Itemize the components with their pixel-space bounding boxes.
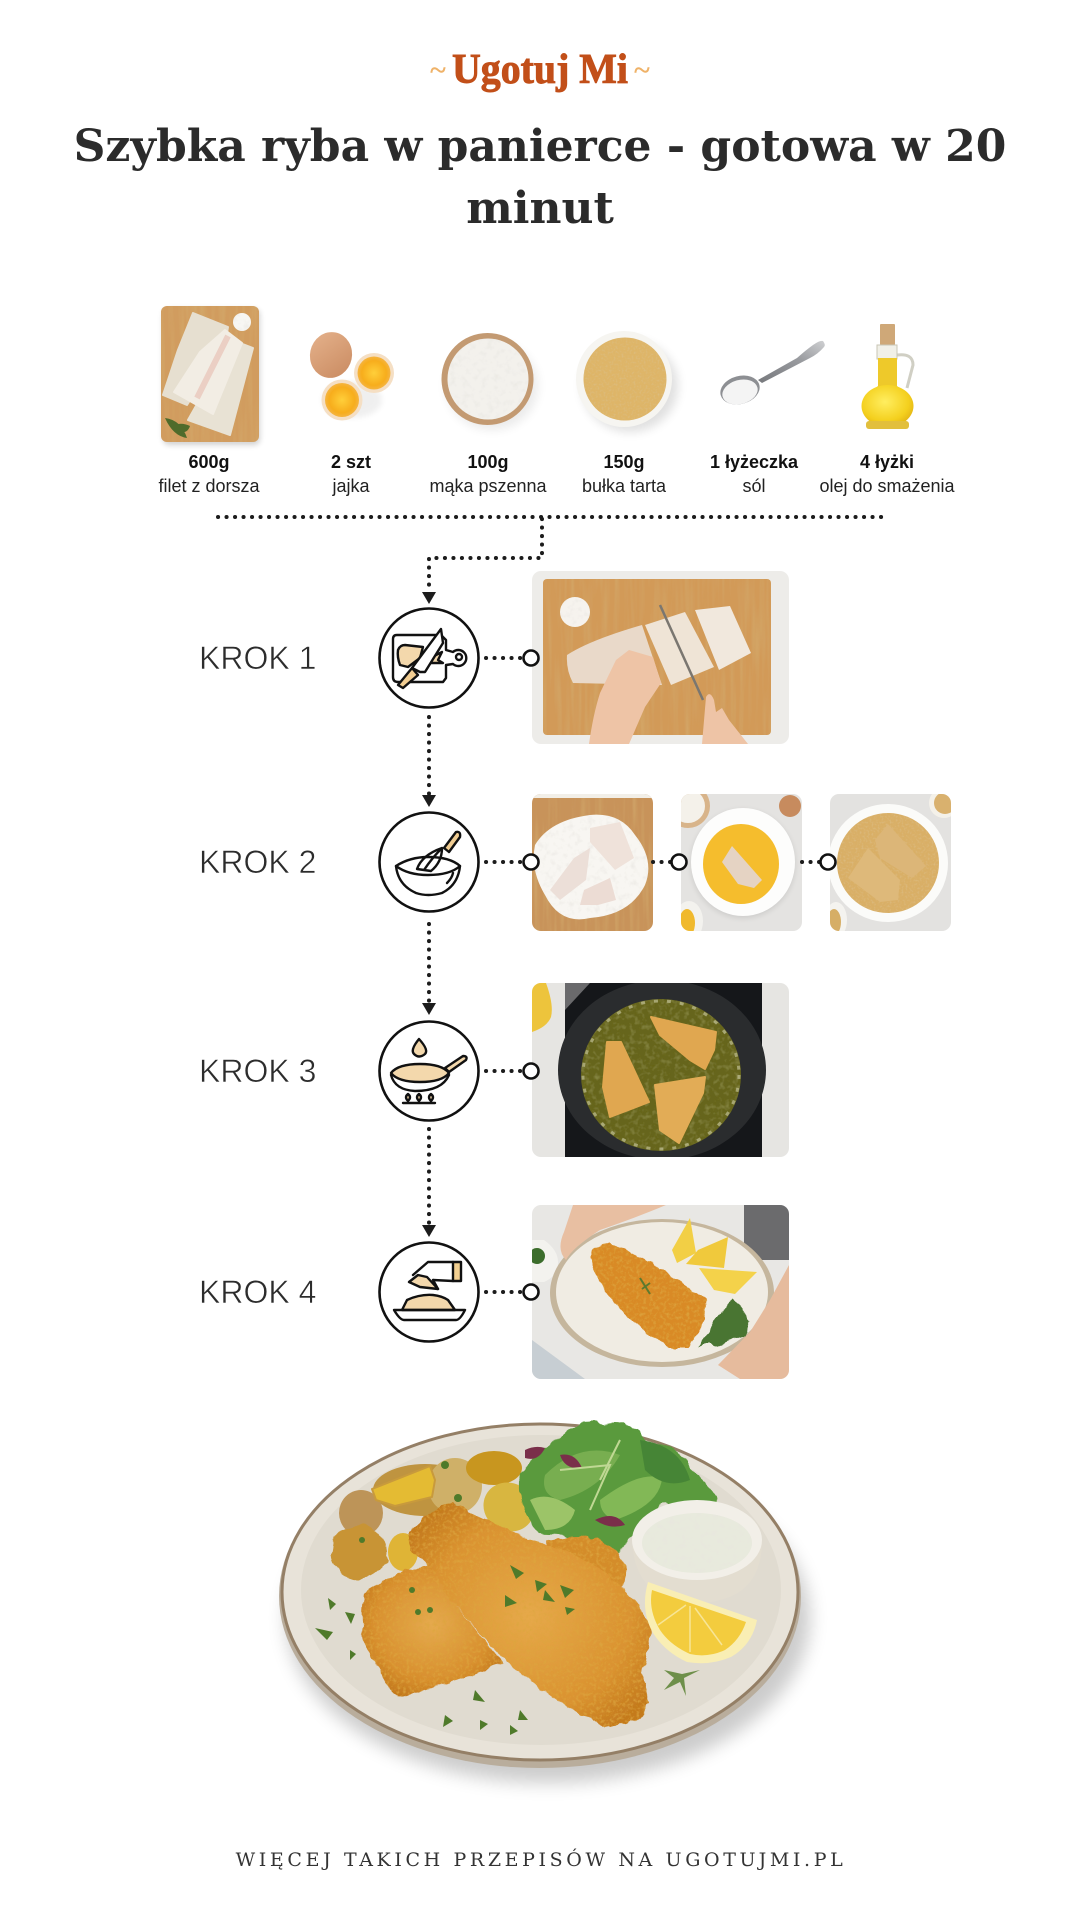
icon: cutting board with fillets xyxy=(161,306,260,445)
plate xyxy=(279,1424,801,1768)
hero plate: finished dish xyxy=(279,1422,810,1783)
ingredient: flour: 100g xyxy=(467,452,509,472)
ingredient: oil xyxy=(819,324,956,496)
photo: dredging in flour xyxy=(532,794,653,931)
title: minut xyxy=(466,183,614,234)
brand logo: Ugotuj Mi xyxy=(452,47,628,93)
arrow: step 1 to step 2 xyxy=(422,717,436,807)
roasted potatoes xyxy=(331,1451,544,1579)
panel: ingredients xyxy=(158,306,956,496)
icon: whisk and bowl xyxy=(380,812,478,912)
herb garnish xyxy=(315,1565,700,1735)
ingredient: breadcrumbs xyxy=(576,331,678,496)
ingredient: cod fillet xyxy=(158,306,261,496)
icon: spoon with salt xyxy=(717,341,825,409)
title xyxy=(74,121,1006,234)
ingredient: flour xyxy=(429,333,548,496)
ingredient: flour: mąka pszenna xyxy=(429,476,548,496)
photo anchor xyxy=(524,650,538,666)
icon: serving on a plate xyxy=(380,1242,478,1342)
step 1 xyxy=(199,571,789,744)
connector to photo xyxy=(486,1069,522,1073)
step label: KROK 4 xyxy=(199,1274,316,1310)
ingredient: oil: 4 łyżki xyxy=(860,452,914,472)
photo: frying in a pan xyxy=(532,980,789,1160)
icon: egg and egg yolks xyxy=(306,328,394,420)
icon: frying pan xyxy=(380,1022,478,1120)
plate shadow xyxy=(286,1453,810,1783)
connector to photo xyxy=(486,1290,522,1294)
step label: KROK 3 xyxy=(199,1053,316,1089)
icon: bowl of breadcrumbs xyxy=(576,331,678,432)
flow connector: ingredients to step 1 xyxy=(218,517,885,604)
arrow: step 3 to step 4 xyxy=(422,1129,436,1237)
photo: plated fish held in hands xyxy=(529,1205,789,1379)
tartar sauce bowl xyxy=(632,1500,762,1603)
ingredient: oil: olej do smażenia xyxy=(819,476,956,496)
ingredient: salt: sól xyxy=(742,476,766,496)
photo: dipping in egg xyxy=(681,794,802,931)
ingredient: breadcrumbs: 150g xyxy=(603,452,645,472)
breaded fish fillets xyxy=(362,1503,651,1728)
lemon wedge xyxy=(645,1582,757,1663)
photo: coating in breadcrumbs xyxy=(830,794,951,931)
photo: slicing the cod fillet xyxy=(532,571,789,744)
photo anchor xyxy=(524,1064,538,1078)
ingredient: cod fillet: filet z dorsza xyxy=(158,476,261,496)
step label: KROK 1 xyxy=(199,640,316,676)
connector to photos xyxy=(486,860,522,864)
brand logo: ~ xyxy=(634,54,650,87)
icon: bowl of flour xyxy=(442,333,538,430)
brand logo: ~ xyxy=(430,54,446,87)
photo anchor xyxy=(524,1284,538,1300)
connector to photo xyxy=(486,656,522,660)
salad leaves xyxy=(520,1422,718,1560)
ingredient: eggs xyxy=(306,328,394,496)
icon: knife and board xyxy=(380,608,478,708)
step label: KROK 2 xyxy=(199,844,316,880)
photo anchors xyxy=(524,854,836,870)
ingredient: eggs: jajka xyxy=(331,476,370,496)
ingredient: eggs: 2 szt xyxy=(331,452,371,472)
ingredient: salt xyxy=(710,341,825,496)
step 2 xyxy=(202,794,951,931)
icon: oil bottle xyxy=(862,324,914,429)
footer text: WIĘCEJ TAKICH PRZEPISÓW NA UGOTUJMI.PL xyxy=(236,1848,846,1871)
ingredient: salt: 1 łyżeczka xyxy=(710,452,799,472)
title: Szybka ryba w panierce - gotowa w 20 xyxy=(74,121,1006,172)
ingredient: breadcrumbs: bułka tarta xyxy=(582,476,667,496)
ingredient: cod fillet: 600g xyxy=(188,452,230,472)
step 4 xyxy=(199,1205,789,1379)
step 3 xyxy=(199,980,789,1160)
arrow: step 2 to step 3 xyxy=(422,924,436,1015)
